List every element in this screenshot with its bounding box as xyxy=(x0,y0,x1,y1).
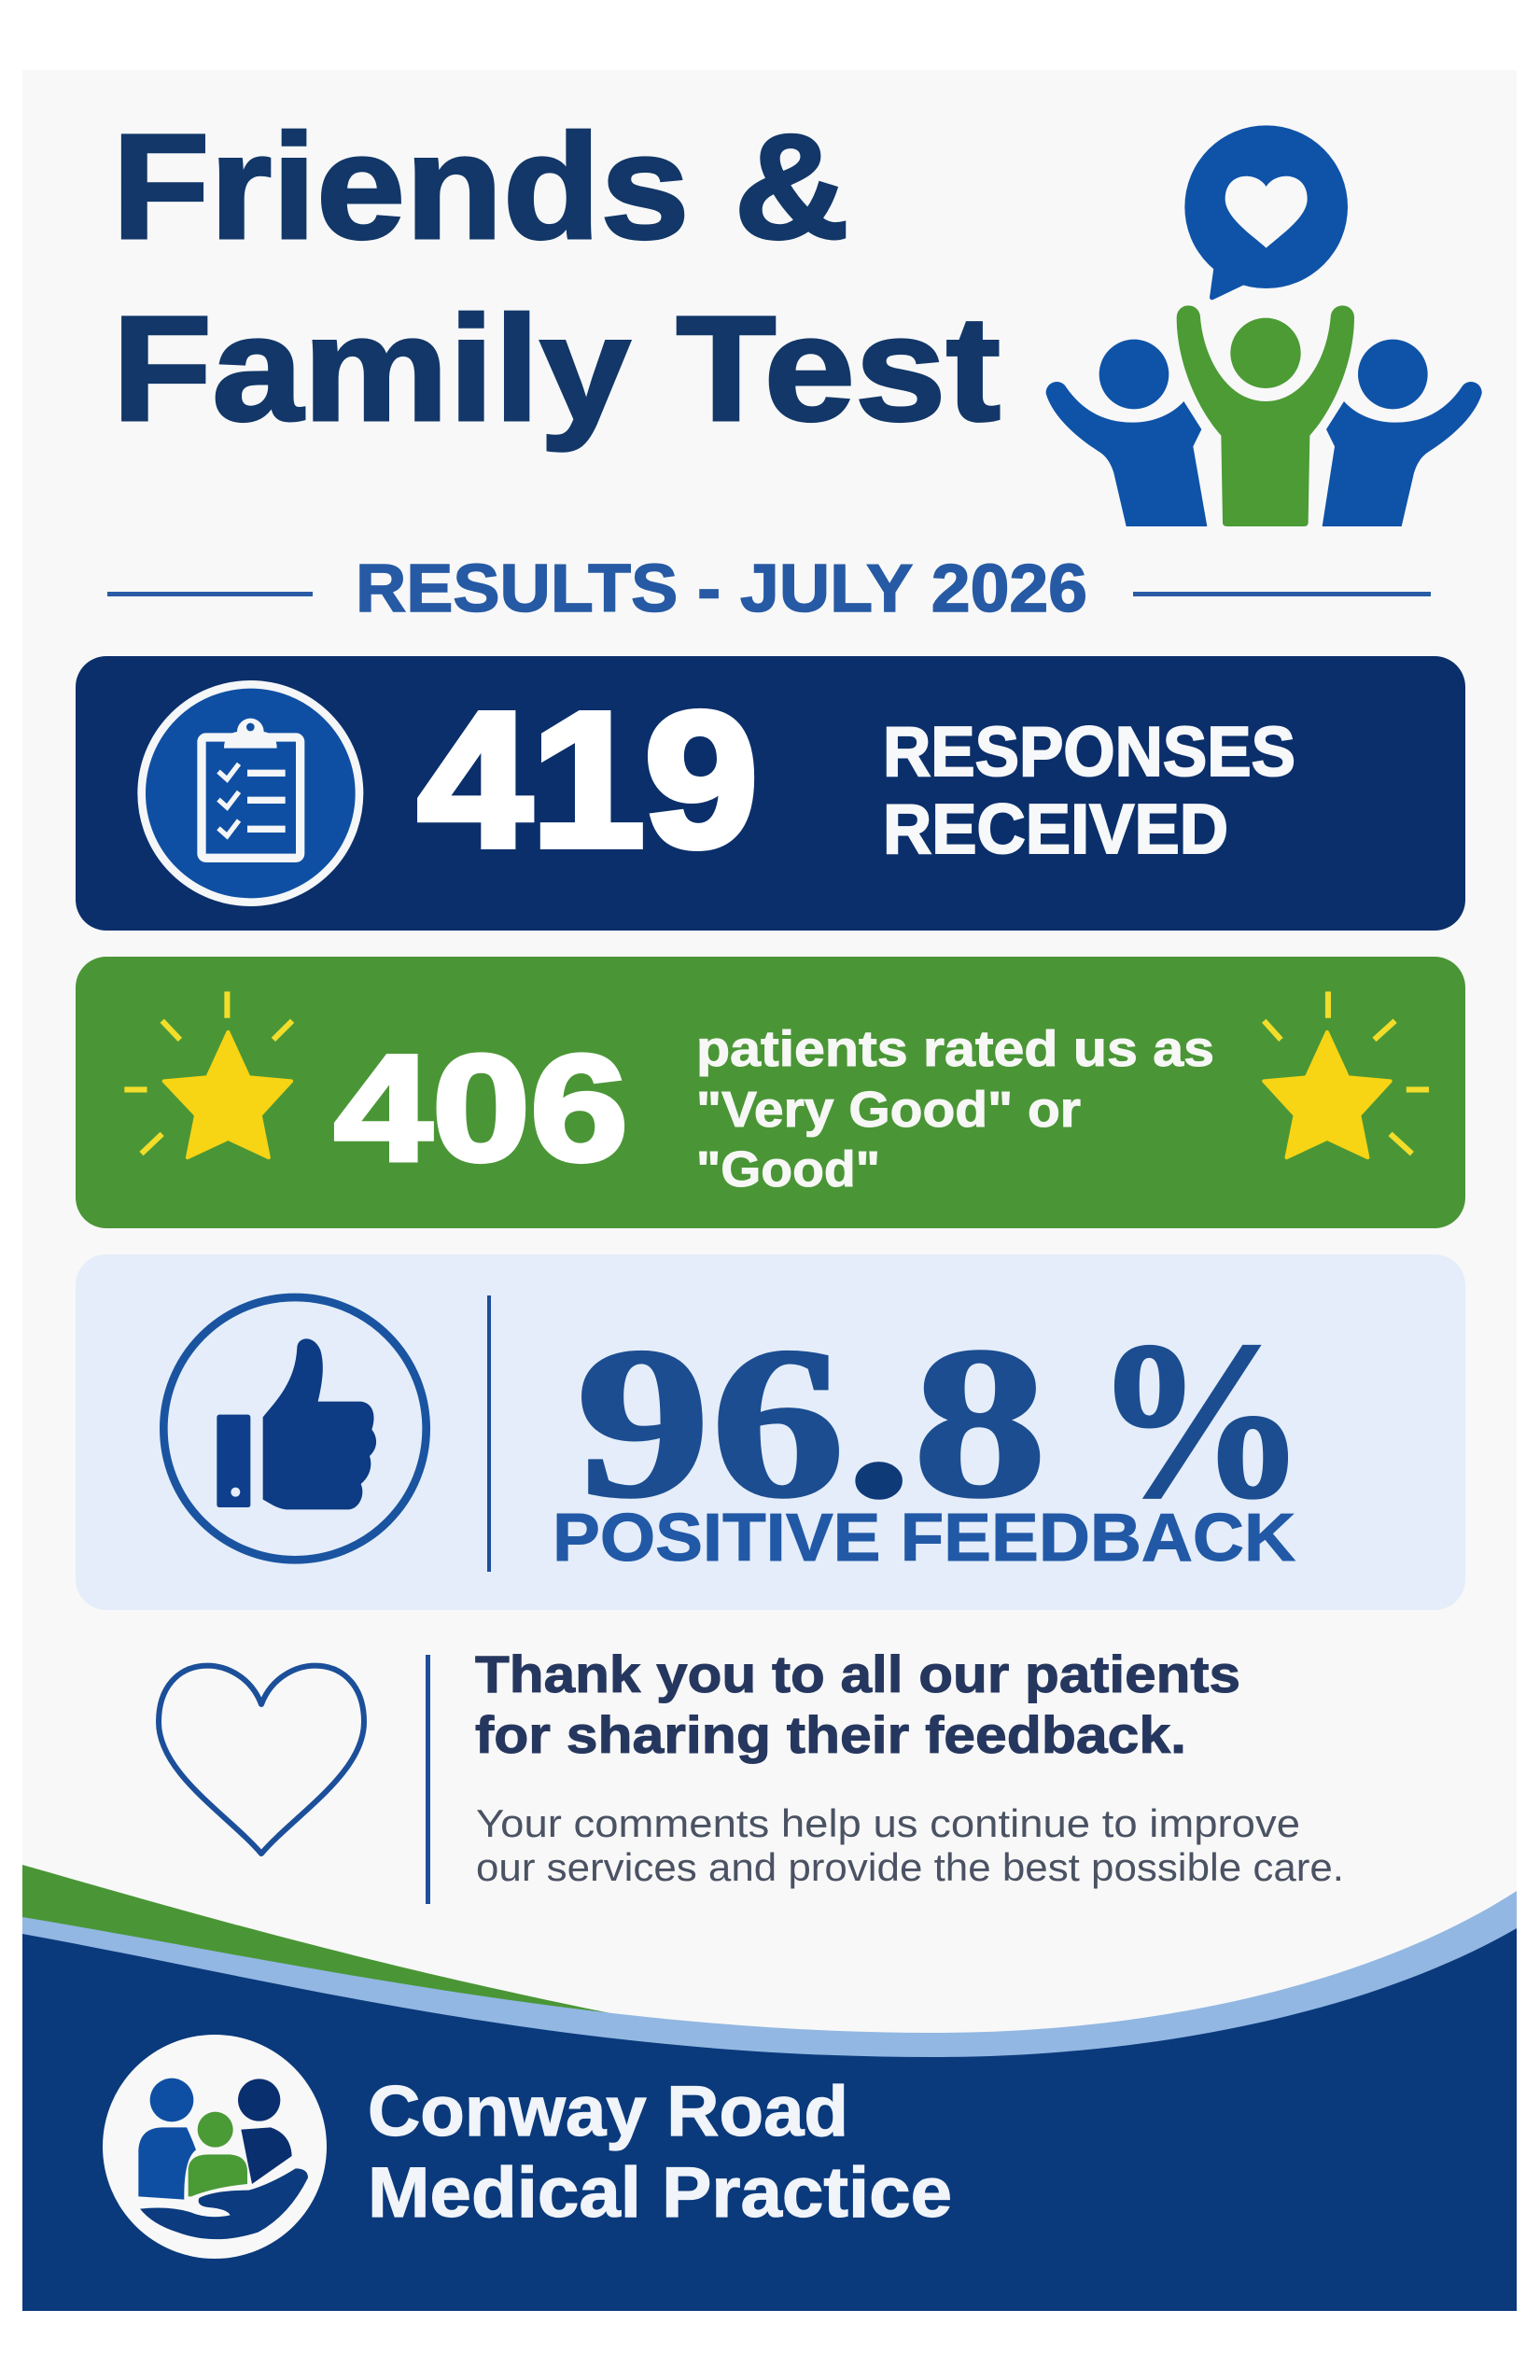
icon: left blue person xyxy=(1046,340,1207,526)
stat: 96.8 percent: % xyxy=(1094,1295,1307,1544)
label: responses received xyxy=(883,712,1295,868)
divider line xyxy=(426,1655,430,1904)
icon: people cheering with heart speech bubble xyxy=(1046,125,1482,526)
label: patients rated us: patients rated us as xyxy=(696,1021,1214,1077)
thank you message: Your comments help us continue to improve xyxy=(476,1801,1300,1845)
panel: responses received xyxy=(76,656,1465,931)
label: patients rated us: "Good" xyxy=(696,1141,880,1197)
footer practice name xyxy=(368,2072,952,2233)
title: Family Test xyxy=(112,285,1001,452)
label: patients rated us: "Very Good" or xyxy=(696,1082,1081,1138)
footer practice name: Medical Practice xyxy=(368,2153,952,2233)
stat: 96.8 percent xyxy=(576,1295,1307,1544)
stat: 406: 406 xyxy=(334,1024,628,1193)
thank you message: Thank you to all our patients xyxy=(475,1645,1240,1703)
stat: 419: 419 xyxy=(418,673,758,887)
title xyxy=(112,103,1001,452)
icon: clipboard checklist xyxy=(142,684,359,903)
thank you message: for sharing their feedback. xyxy=(475,1705,1186,1764)
subtitle: results date with rules xyxy=(107,552,1431,626)
icon: left star with rays xyxy=(124,991,292,1157)
footer waves xyxy=(22,1865,1517,2311)
label: positive feedback: POSITIVE FEEDBACK xyxy=(553,1501,1295,1575)
label: responses received: RESPONSES xyxy=(883,712,1295,791)
icon: speech bubble with heart xyxy=(1184,125,1348,300)
thank you message xyxy=(475,1645,1344,1889)
footer practice name: Conway Road xyxy=(368,2072,848,2151)
icon: thumbs up xyxy=(163,1297,427,1560)
label: responses received: RECEIVED xyxy=(883,790,1228,868)
panel: positive feedback xyxy=(76,1254,1465,1610)
stat: 96.8 percent: 96.8 xyxy=(576,1303,1047,1543)
icon: right star with rays xyxy=(1264,991,1429,1157)
icon: heart outline xyxy=(159,1666,364,1854)
subtitle: results date with rules: RESULTS - JULY 2026 xyxy=(356,552,1087,626)
panel: rated very good or good xyxy=(76,957,1465,1228)
title: Friends & xyxy=(112,103,849,270)
thank you message: our services and provide the best possible care. xyxy=(476,1845,1344,1889)
label: patients rated us xyxy=(696,1021,1214,1197)
icon: right blue person xyxy=(1323,340,1482,526)
footer logo: family in hand xyxy=(103,2035,327,2259)
icon: centre green person xyxy=(1177,305,1354,526)
